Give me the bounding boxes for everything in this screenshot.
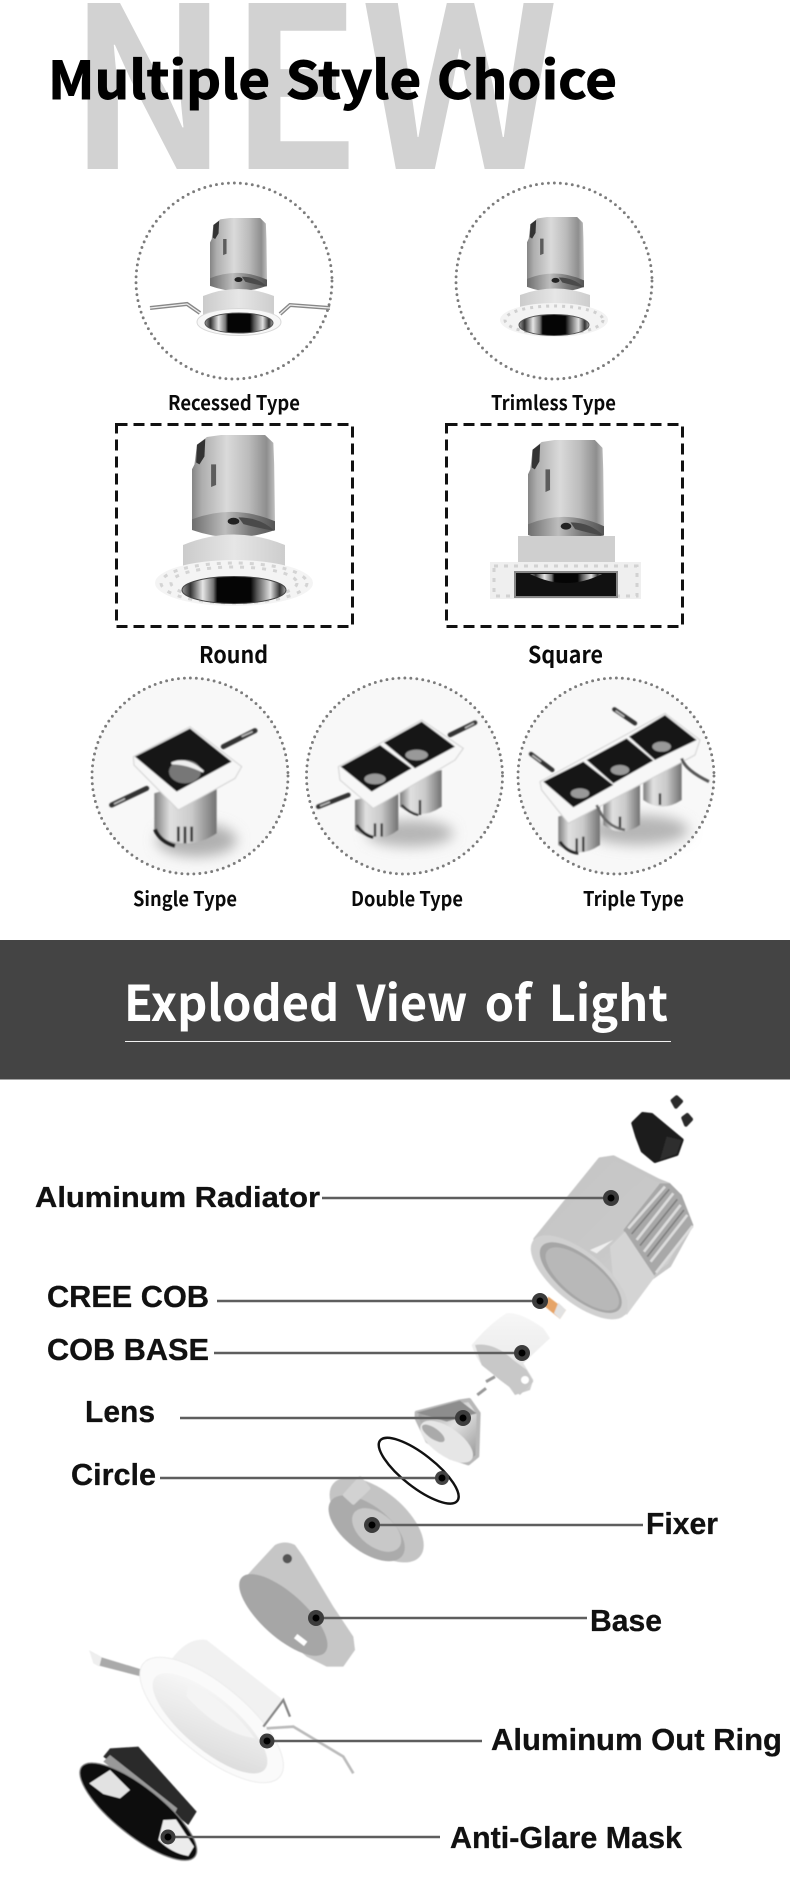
dotted circle [136, 183, 332, 379]
icon: double lamp [318, 720, 475, 847]
part: screws and black cap [633, 1097, 691, 1161]
part: CREE COB [545, 1297, 566, 1319]
panel: recessed type [136, 183, 332, 416]
callout: lens [85, 1394, 471, 1429]
part: COB base [472, 1313, 550, 1395]
icon: round lamp [155, 435, 313, 606]
label: Square [528, 636, 603, 670]
label: Recessed Type [168, 387, 300, 416]
banner underline [125, 1041, 671, 1042]
callout: circle [71, 1457, 449, 1492]
icon: triple lamp [531, 709, 709, 853]
callout: base [308, 1603, 662, 1638]
panel: double type [306, 678, 502, 912]
panel: single type [92, 678, 288, 912]
callout: COB BASE [47, 1332, 530, 1367]
callout: fixer [364, 1506, 718, 1541]
part: anti-glare mask [67, 1747, 210, 1875]
icon: single lamp [112, 727, 255, 857]
callout: lens: Lens [85, 1394, 155, 1429]
callout: COB BASE: COB BASE [47, 1332, 209, 1367]
part: lens [413, 1400, 480, 1471]
callout: CREE COB: CREE COB [47, 1279, 209, 1314]
icon: trimless lamp [500, 217, 608, 337]
label: Double Type [351, 883, 463, 912]
callout: CREE COB [47, 1279, 548, 1314]
part: base [227, 1542, 355, 1669]
panel: trimless type [456, 183, 652, 416]
dotted circle [518, 678, 714, 874]
callout: aluminum out ring: Aluminum Out Ring [491, 1722, 782, 1757]
label: Round [199, 636, 268, 670]
part: aluminum radiator [518, 1157, 693, 1334]
panel: round [116, 424, 352, 670]
callout: aluminum radiator [35, 1182, 619, 1214]
icon: square lamp [490, 440, 641, 599]
callout: aluminum out ring [260, 1722, 782, 1757]
callout: circle: Circle [71, 1457, 156, 1492]
banner: Exploded View of Light [0, 940, 790, 1080]
part: aluminum out ring [89, 1636, 353, 1804]
callout: fixer: Fixer [646, 1506, 718, 1541]
callout: anti-glare mask: Anti-Glare Mask [450, 1820, 683, 1855]
dashed box [446, 424, 682, 626]
part: fixer [315, 1462, 438, 1578]
dotted circle [456, 183, 652, 379]
title: Multiple Style Choice: Multiple Style Choice [48, 39, 617, 114]
panel: triple type [518, 678, 714, 912]
dotted circle [92, 678, 288, 874]
callout: base: Base [590, 1603, 662, 1638]
exploded diagram [35, 1097, 782, 1875]
label: Trimless Type [491, 387, 616, 416]
callout: anti-glare mask [160, 1820, 683, 1855]
label: Single Type [133, 883, 237, 912]
banner title: Exploded View of Light [124, 965, 668, 1036]
part: O-ring circle [370, 1428, 467, 1514]
icon: recessed lamp [150, 218, 330, 336]
panel: square [446, 424, 682, 670]
callout: aluminum radiator: Aluminum Radiator [35, 1182, 320, 1214]
dotted circle [306, 678, 502, 874]
dashed box [116, 424, 352, 626]
label: Triple Type [583, 883, 684, 912]
